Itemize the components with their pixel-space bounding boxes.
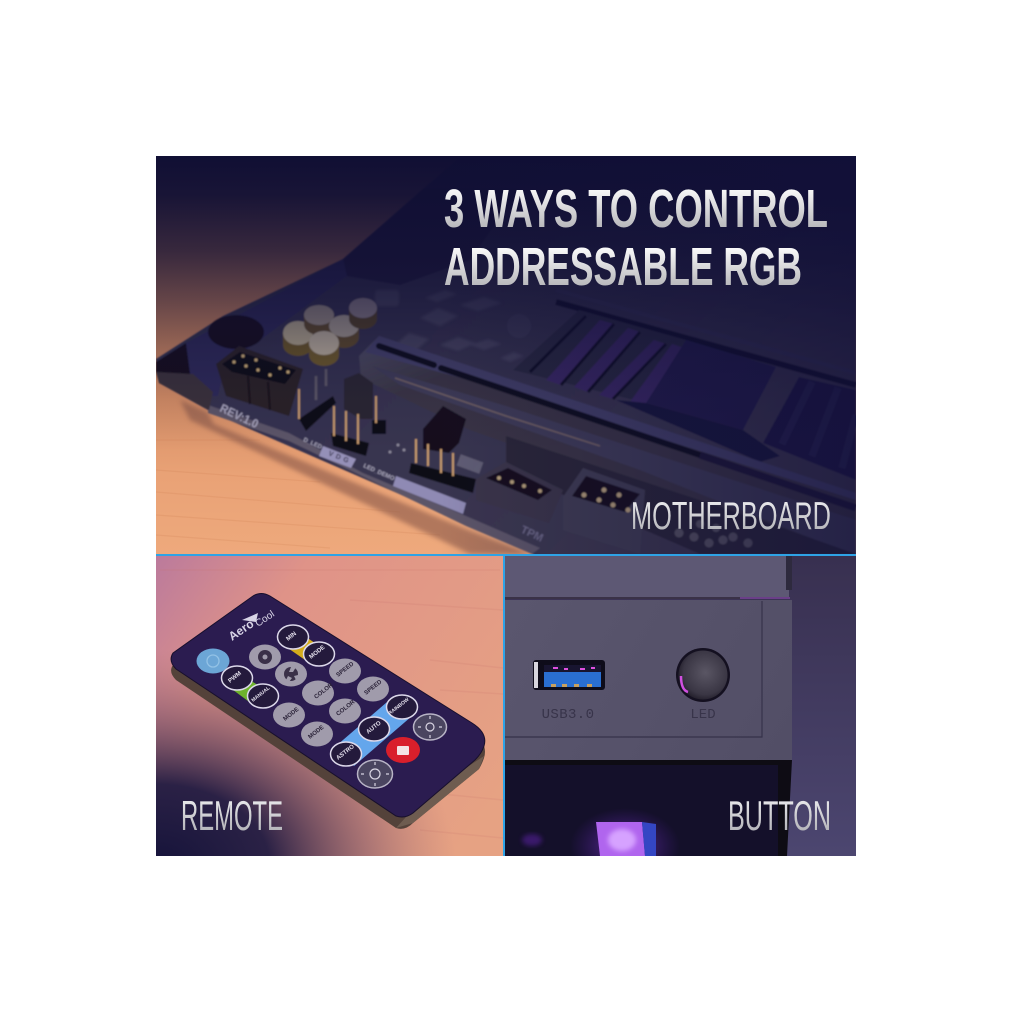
purple fan glow <box>522 808 680 884</box>
button labels: MANUAL <box>251 686 271 704</box>
button labels: PWM <box>228 671 243 685</box>
chip field <box>375 290 524 362</box>
second heatsink <box>763 377 856 480</box>
mounting hole <box>208 315 264 349</box>
title: ADDRESSABLE RGB <box>444 237 802 297</box>
solder points <box>674 520 752 548</box>
label: remote: REMOTE <box>181 792 283 839</box>
panel: motherboard photo <box>156 140 856 560</box>
red lock button <box>386 737 420 763</box>
remote control: MODE <box>308 725 325 741</box>
large 9-pin header <box>216 346 303 416</box>
divider: horizontal blue line <box>156 554 856 556</box>
remote top face <box>171 594 485 817</box>
wood grain <box>454 796 503 838</box>
USB port <box>533 660 605 690</box>
colored bands <box>290 639 314 660</box>
pin housings <box>299 396 476 493</box>
brand logo <box>230 610 274 641</box>
label: motherboard: MOTHERBOARD <box>631 495 831 538</box>
label: button: BUTTON <box>728 792 831 839</box>
remote control: SPEED <box>336 661 356 679</box>
USB label: USB3.0 <box>542 707 594 723</box>
divider: vertical blue line <box>503 556 505 856</box>
LED button <box>676 648 730 702</box>
brand logo: Aero <box>226 617 256 643</box>
remote control: SPEED <box>364 679 384 697</box>
silkscreen labels: LED_DEMO <box>362 463 395 483</box>
solder sparkle <box>388 444 483 474</box>
button labels: AUTO <box>366 720 383 736</box>
infographic canvas <box>156 156 856 856</box>
remote control: COLOR <box>336 699 357 718</box>
circuit board surface <box>156 196 856 554</box>
case front plate <box>505 600 792 760</box>
panel: remote photo <box>156 556 503 856</box>
connector two <box>564 468 645 528</box>
title <box>444 179 828 297</box>
gray buttons <box>249 644 389 746</box>
rear dark plateau <box>390 282 402 284</box>
button labels: MODE <box>309 645 326 661</box>
silkscreen labels: D_LED <box>302 437 323 451</box>
board front edge <box>208 405 540 554</box>
PCIe slot <box>359 336 856 560</box>
remote control <box>171 594 485 829</box>
remote casing side <box>171 666 485 829</box>
button labels <box>228 631 411 762</box>
grey pins <box>316 369 326 400</box>
power button <box>196 648 230 674</box>
case edge <box>786 556 792 590</box>
silkscreen chips <box>319 446 356 468</box>
fan icons <box>258 650 298 681</box>
silkscreen labels: VDG <box>327 450 352 466</box>
dark mode buttons <box>222 625 418 766</box>
brightness buttons <box>358 714 446 788</box>
fan header <box>423 406 466 453</box>
silkscreen labels: REV:1.0 <box>218 402 260 431</box>
pin header block <box>344 373 373 419</box>
silkscreen labels: TPM <box>519 524 545 545</box>
slot grooves <box>379 346 700 455</box>
button labels: RAINBOW <box>388 697 411 717</box>
title: 3 WAYS TO CONTROL <box>444 179 828 239</box>
gold pins <box>299 389 453 476</box>
remote control: COLOR <box>314 682 335 701</box>
ram rail <box>556 290 856 385</box>
capacitors <box>283 298 377 366</box>
brand logo: Cool <box>254 609 277 629</box>
wood grain <box>156 474 421 548</box>
case top face <box>505 556 789 598</box>
heatsink plate <box>616 340 780 462</box>
LED label: LED <box>690 707 716 723</box>
button labels: ASTRO <box>336 744 356 762</box>
panel: button photo <box>505 556 856 884</box>
remote control: MODE <box>283 707 300 723</box>
corner shield <box>156 344 228 410</box>
case frame below plate <box>505 760 792 856</box>
silkscreen labels <box>218 402 545 545</box>
glass window <box>505 765 778 856</box>
top dark overlay <box>156 156 856 430</box>
connector <box>486 462 562 500</box>
button labels: MIN <box>286 631 298 643</box>
board underside shadow <box>180 400 530 554</box>
heatsink fins <box>513 310 686 406</box>
